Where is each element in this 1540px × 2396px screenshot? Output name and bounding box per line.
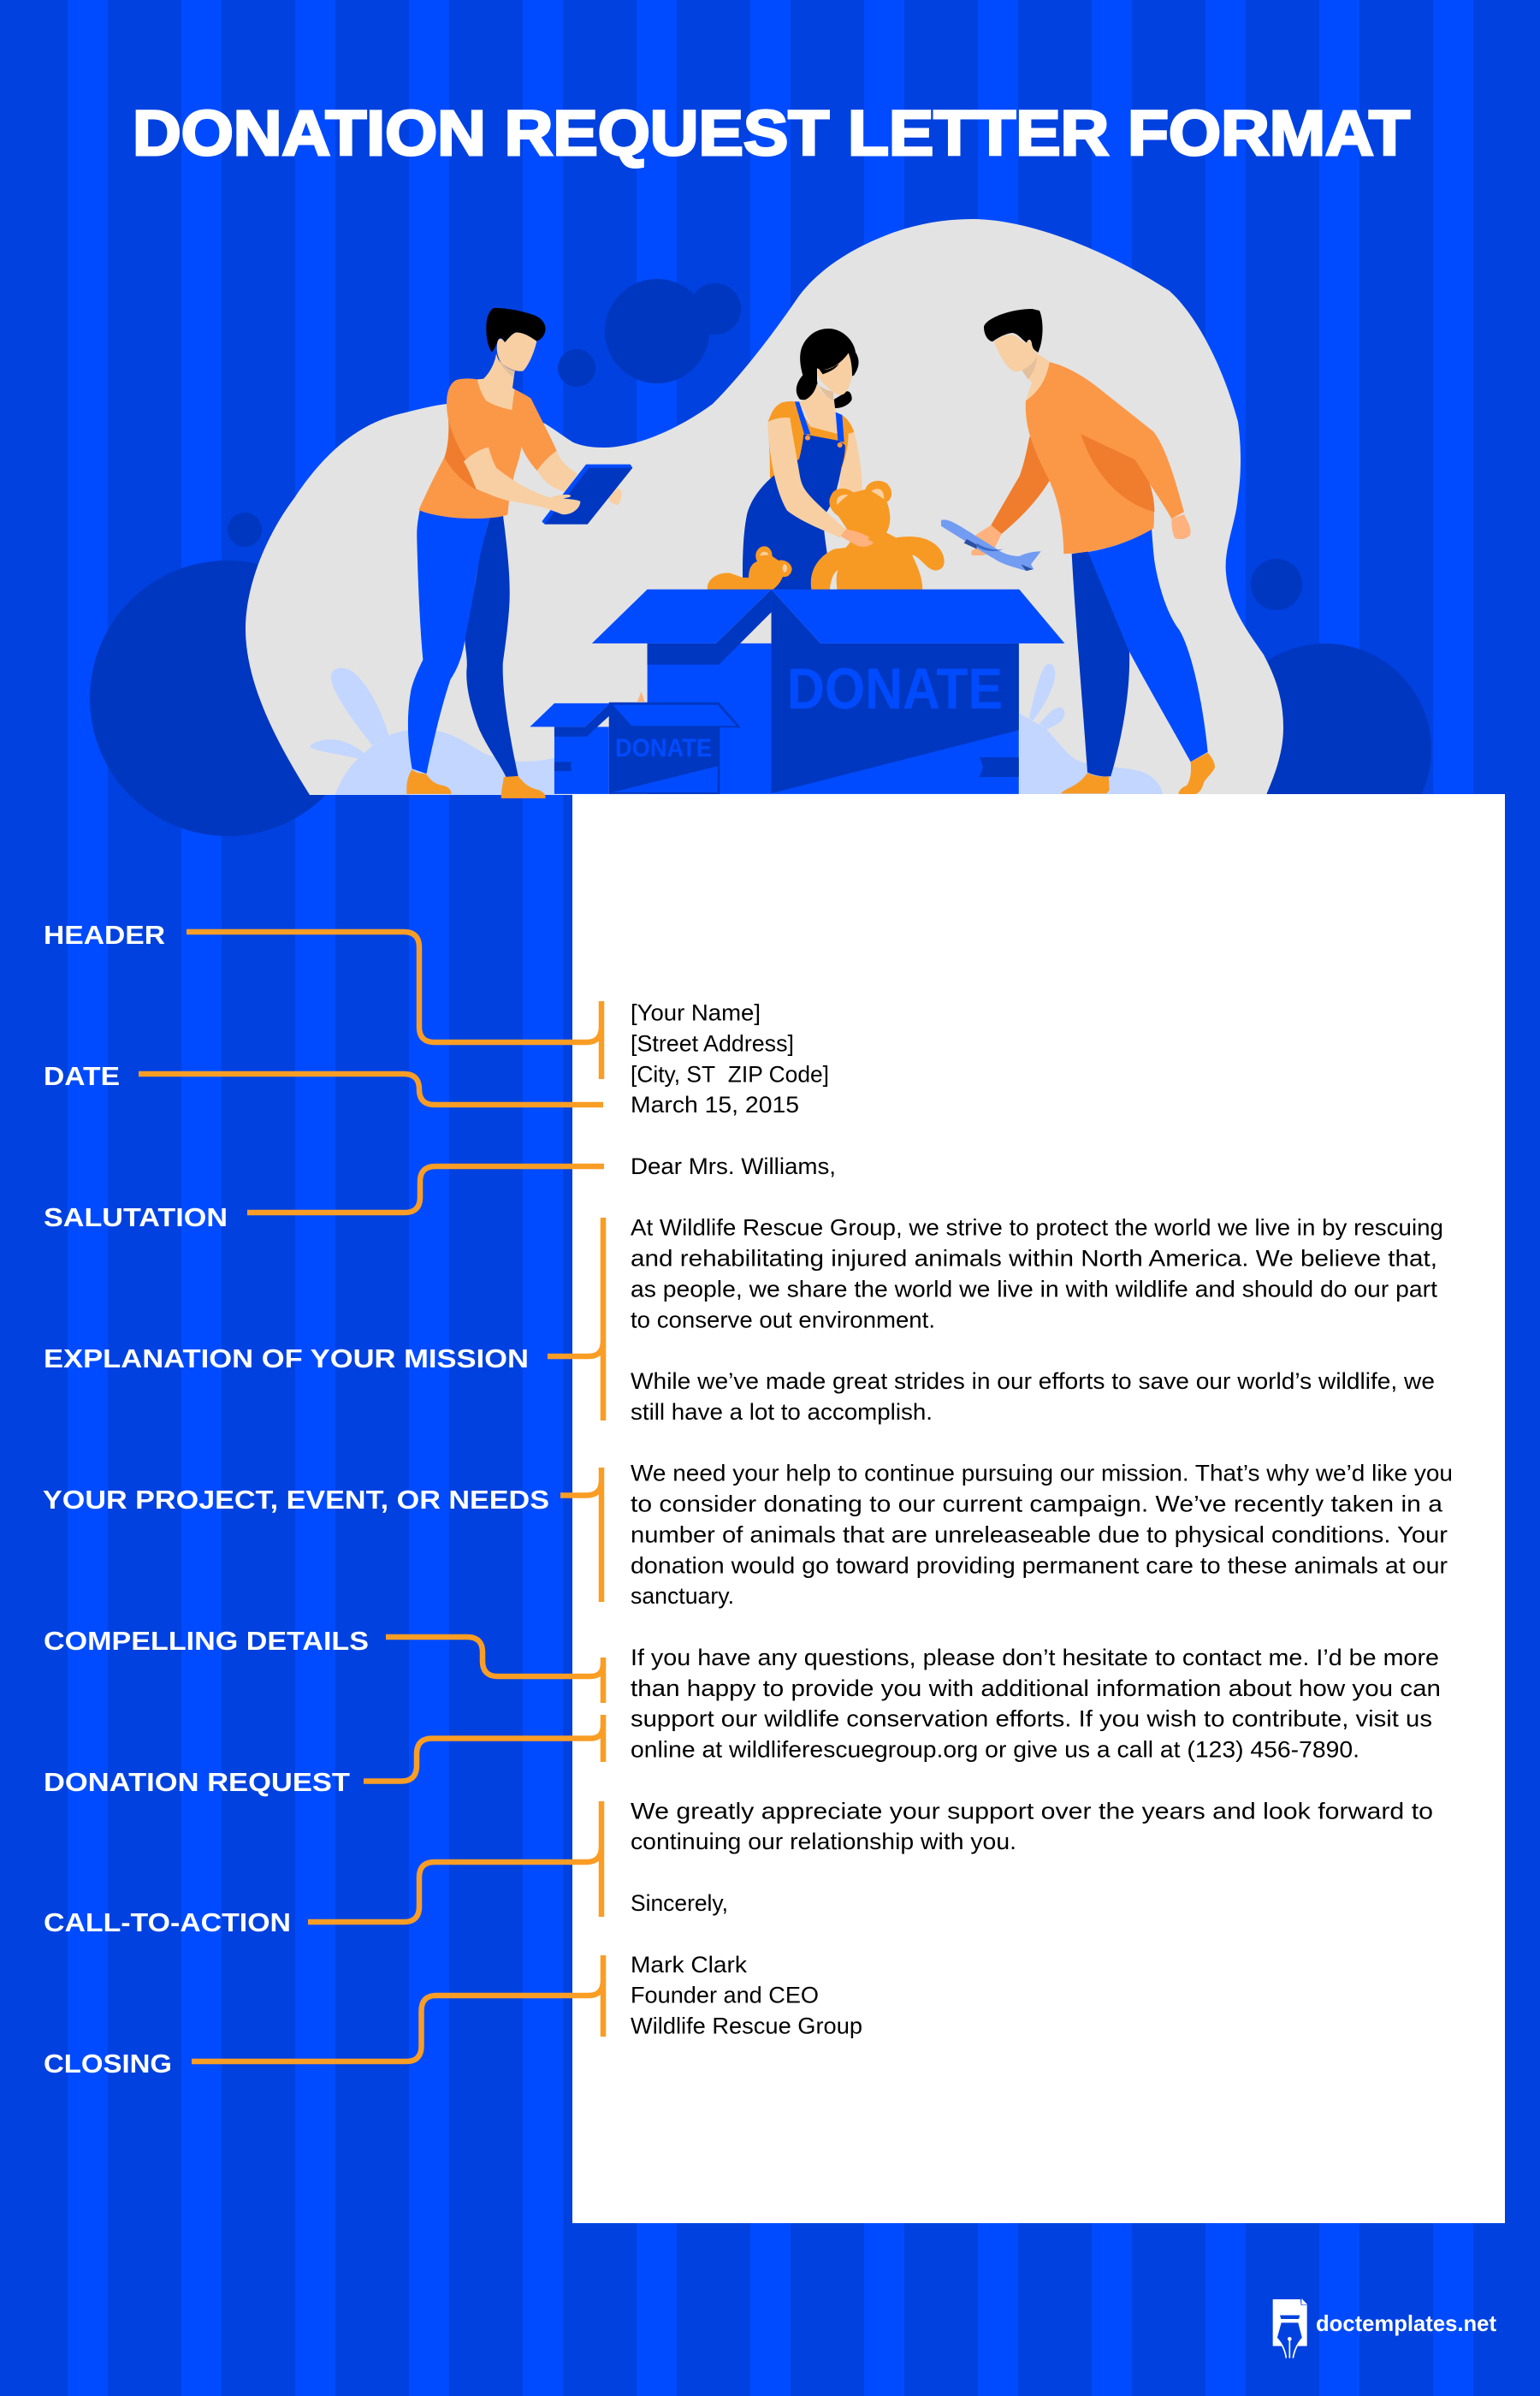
logo: doctemplates.net	[1273, 2298, 1496, 2358]
callout: compelling details	[44, 1626, 603, 1703]
letter panel	[572, 794, 1505, 2223]
bunny right	[1020, 664, 1163, 795]
letter text: Founder and CEO	[631, 1983, 819, 2008]
callout: your project, event, or needs: YOUR PROJECT, EVENT, OR NEEDS	[43, 1485, 549, 1515]
callout: compelling details: COMPELLING DETAILS	[44, 1626, 369, 1656]
letter text: [City, ST ZIP Code]	[631, 1061, 829, 1087]
callout: explanation of your mission	[44, 1218, 603, 1420]
callout: salutation: SALUTATION	[44, 1202, 228, 1232]
letter text: as people, we share the world we live in with wildlife and should do our part	[631, 1276, 1438, 1302]
title: DONATION REQUEST LETTER FORMAT	[133, 98, 1410, 169]
letter text: At Wildlife Rescue Group, we strive to protect the world we live in by rescuing	[631, 1215, 1443, 1241]
letter text: than happy to provide you with additional information about how you can	[631, 1675, 1441, 1701]
letter text: Wildlife Rescue Group	[631, 2013, 862, 2038]
background circles	[90, 279, 1431, 856]
letter text: donation would go toward providing permanent care to these animals at our	[631, 1552, 1448, 1578]
letter text: Sincerely,	[631, 1890, 728, 1916]
grey blob	[246, 219, 1283, 795]
letter text: number of animals that are unreleaseable due to physical conditions. Your	[631, 1521, 1448, 1547]
letter text: We greatly appreciate your support over the years and look forward to	[631, 1798, 1433, 1824]
callout: date: DATE	[44, 1061, 120, 1091]
man with toy plane	[941, 309, 1215, 794]
small donation box	[530, 691, 741, 794]
big donation box	[592, 590, 1064, 794]
letter text: March 15, 2015	[631, 1092, 799, 1118]
small box label: DONATE	[615, 734, 712, 762]
callout: donation request: DONATION REQUEST	[44, 1767, 350, 1797]
letter text: Mark Clark	[631, 1952, 748, 1978]
callout: call-to-action: CALL-TO-ACTION	[44, 1907, 291, 1937]
letter text: support our wildlife conservation efforts. If you wish to contribute, visit us	[631, 1706, 1432, 1732]
callout: date	[44, 1061, 603, 1105]
icon: pen nib document	[1273, 2298, 1307, 2358]
letter text	[631, 999, 1453, 2038]
callout: closing: CLOSING	[44, 2049, 172, 2079]
callout: donation request	[44, 1715, 603, 1797]
letter text: to consider donating to our current campaign. We’ve recently taken in a	[631, 1492, 1443, 1517]
letter text: still have a lot to accomplish.	[631, 1399, 933, 1425]
letter text: continuing our relationship with you.	[631, 1829, 1016, 1854]
letter text: If you have any questions, please don’t hesitate to contact me. I’d be more	[631, 1645, 1439, 1670]
logo wordmark: doctemplates.net	[1316, 2310, 1496, 2336]
callout: explanation of your mission: EXPLANATION OF YOUR MISSION	[44, 1343, 529, 1373]
callout: header	[44, 920, 601, 1079]
callout: closing	[44, 1955, 603, 2079]
letter text: online at wildliferescuegroup.org or give us a call at (123) 456-7890.	[631, 1737, 1359, 1763]
letter text: [Street Address]	[631, 1030, 794, 1056]
letter text: We need your help to continue pursuing our mission. That’s why we’d like you	[631, 1461, 1453, 1486]
man with tablet	[406, 308, 632, 798]
bunny left	[311, 668, 554, 795]
callout: your project, event, or needs	[43, 1468, 601, 1602]
callout: salutation	[44, 1166, 604, 1232]
letter text: [Your Name]	[631, 999, 761, 1025]
letter text: to conserve out environment.	[631, 1307, 935, 1332]
letter text: Dear Mrs. Williams,	[631, 1154, 836, 1179]
callout: call-to-action	[44, 1801, 601, 1937]
girl with teddy bears	[708, 329, 945, 590]
letter text: While we’ve made great strides in our efforts to save our world’s wildlife, we	[631, 1368, 1435, 1394]
illustration: donation scene	[90, 219, 1431, 856]
letter text: sanctuary.	[631, 1583, 734, 1609]
box label: DONATE	[787, 656, 1003, 721]
callout: header: HEADER	[44, 920, 165, 950]
letter text: and rehabilitating injured animals within North America. We believe that,	[631, 1246, 1437, 1272]
